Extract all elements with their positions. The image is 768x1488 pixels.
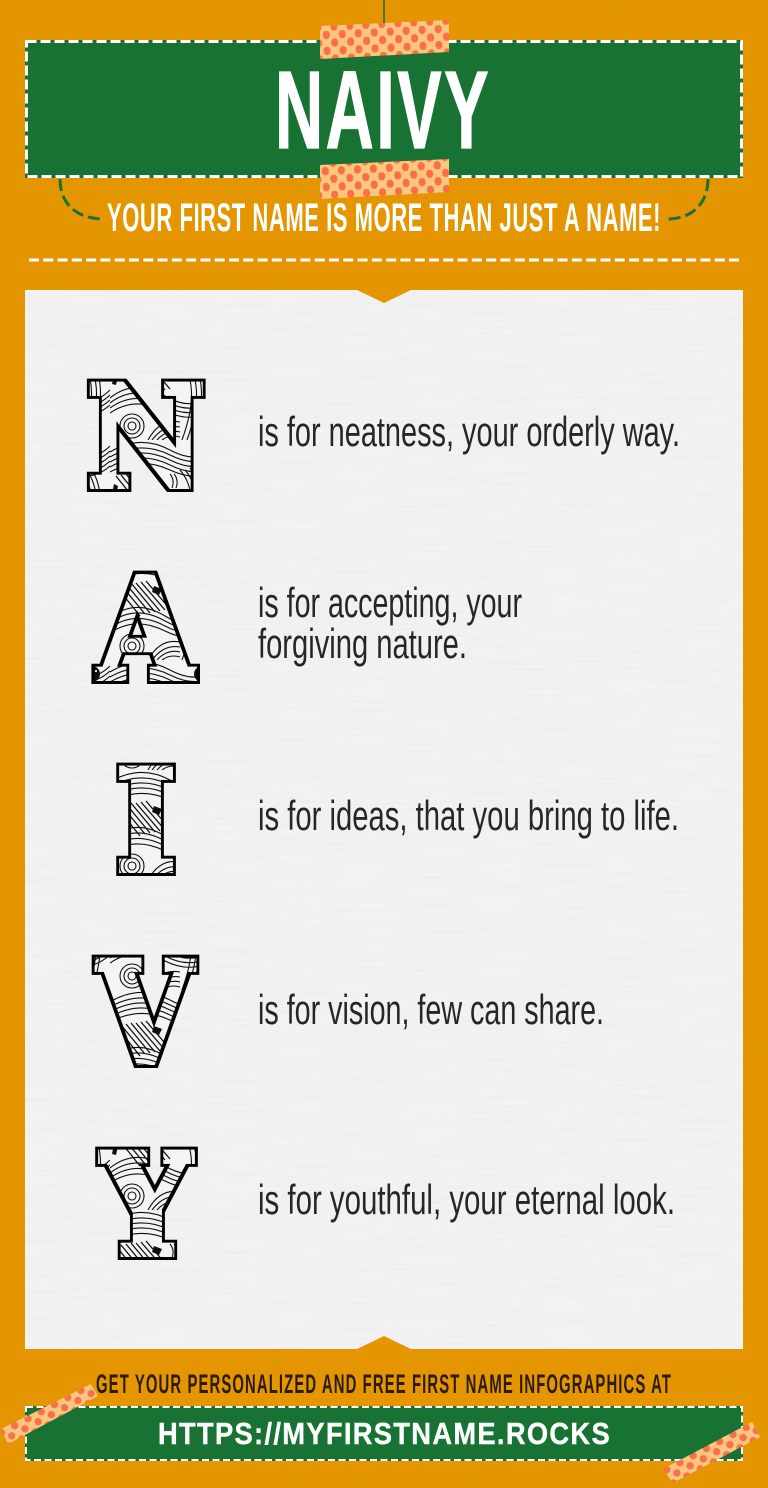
row: A <box>96 547 522 711</box>
panel top notch <box>357 290 411 303</box>
letter Y: Y <box>100 1123 193 1287</box>
letter A: A <box>96 547 195 711</box>
tape: footer left <box>1 1384 98 1444</box>
row: I <box>116 739 679 903</box>
panel bottom notch <box>357 1336 411 1349</box>
connector: right <box>668 179 708 219</box>
text A: forgiving nature. <box>258 620 467 667</box>
footer banner <box>25 1406 743 1461</box>
letter V: V <box>97 931 194 1095</box>
row: N <box>87 355 680 519</box>
tape: footer right <box>663 1422 760 1483</box>
hanging line <box>383 0 385 24</box>
title banner <box>25 40 743 178</box>
text V: is for vision, few can share. <box>258 986 604 1033</box>
row: Y <box>100 1123 675 1287</box>
footer url: HTTPS://MYFIRSTNAME.ROCKS <box>158 1416 611 1451</box>
panel: letters <box>25 290 743 1349</box>
row: V <box>97 931 604 1095</box>
letter N: N <box>87 355 205 519</box>
dashed divider <box>29 258 739 262</box>
title: NAIVY <box>275 49 491 172</box>
tape: banner bottom <box>320 159 449 199</box>
text A <box>258 579 522 667</box>
letter I: I <box>116 739 176 903</box>
tape: banner top <box>320 20 449 59</box>
connector: left <box>60 179 104 219</box>
text A: is for accepting, your <box>258 579 522 626</box>
